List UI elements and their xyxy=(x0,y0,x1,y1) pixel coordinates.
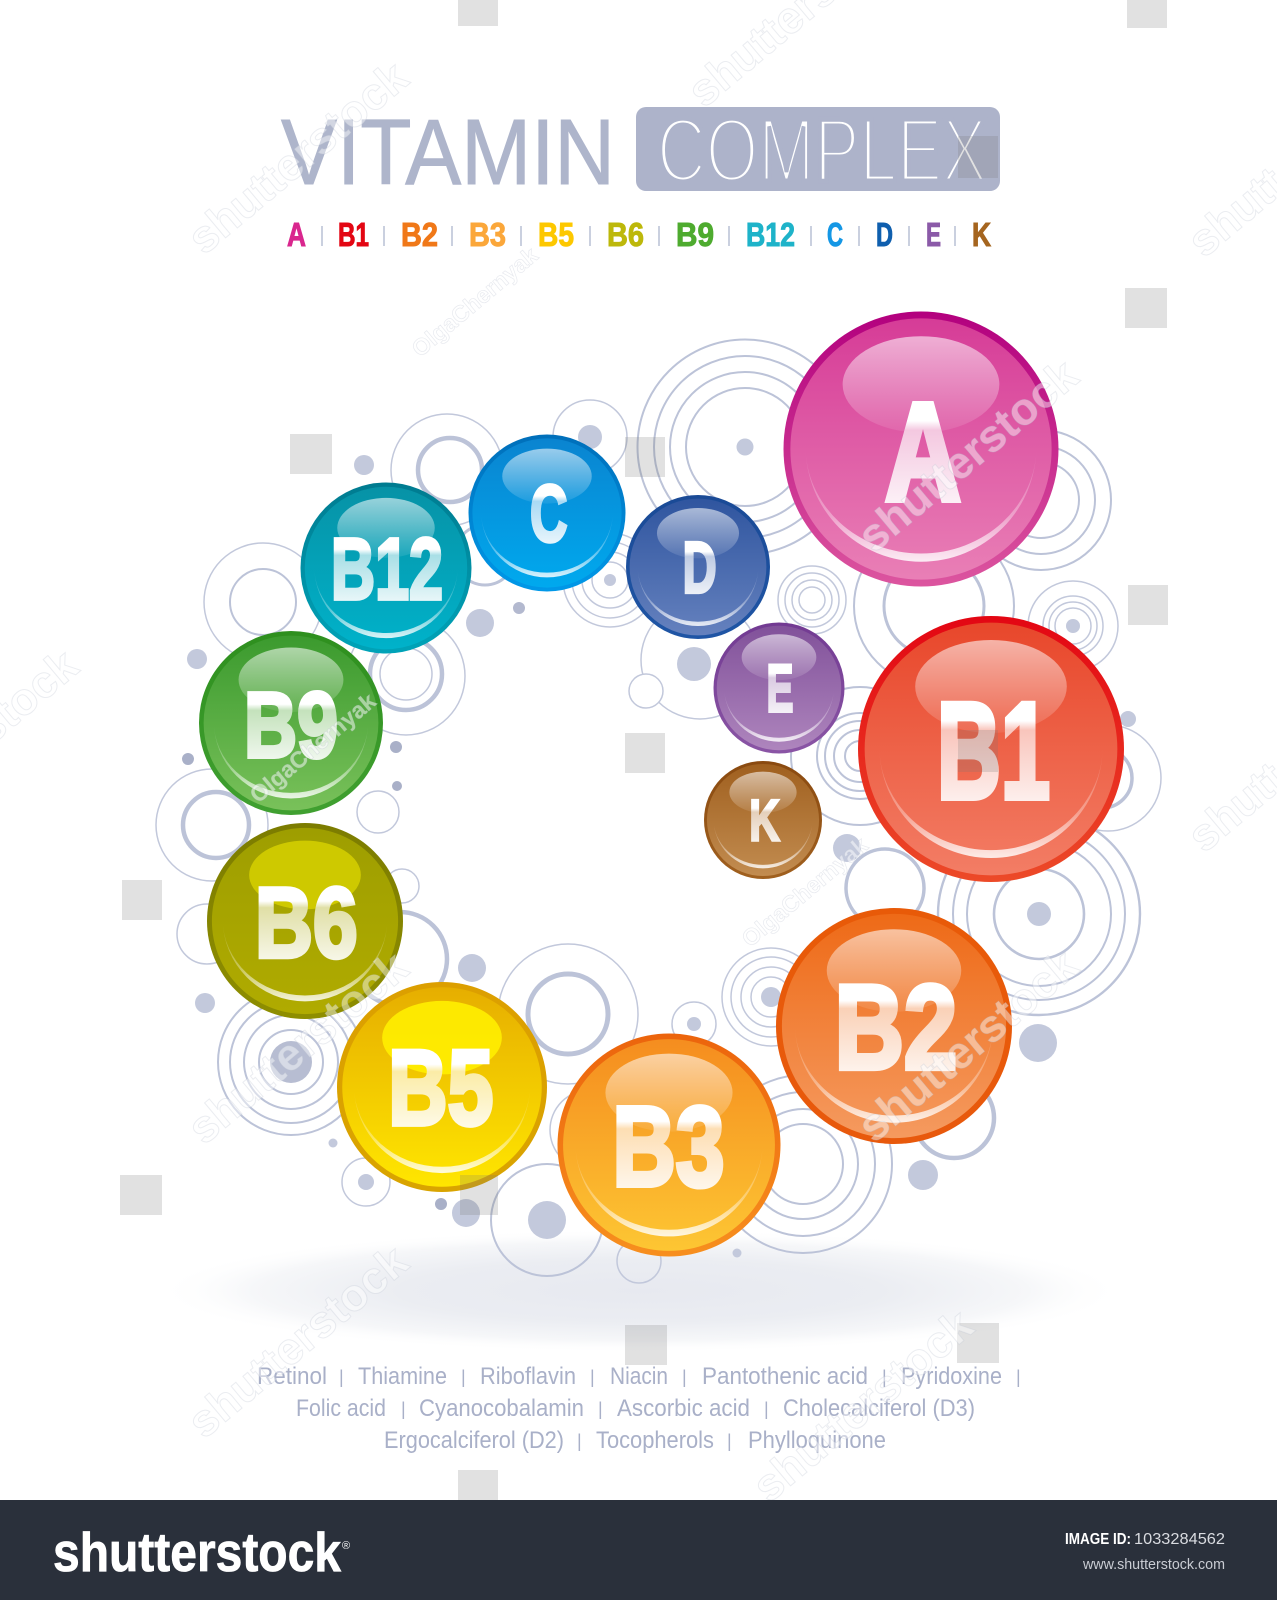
vitamin chemical names text block: | xyxy=(339,1367,344,1387)
vitamin chemical names text block: Riboflavin xyxy=(480,1363,576,1390)
bubble: vitamin B2: B2 xyxy=(835,960,957,1094)
bubble: vitamin A: A xyxy=(885,374,961,530)
vitamin letter legend row: B1 xyxy=(338,217,369,254)
vitamin letter legend row: B9 xyxy=(676,217,714,254)
stock watermarks: OlgaChernyak xyxy=(407,242,543,362)
bubble: vitamin B6 xyxy=(207,823,403,1019)
registered mark: ® xyxy=(342,1540,350,1552)
stock watermarks: OlgaChernyak xyxy=(737,832,873,952)
bubble: vitamin B3: B3 xyxy=(612,1084,724,1210)
stock watermarks: shutterstock xyxy=(178,940,418,1154)
vitamin letter legend row: A xyxy=(287,217,306,254)
vitamin chemical names text block: | xyxy=(590,1367,595,1387)
vitamin chemical names text block: Phylloquinone xyxy=(748,1427,886,1454)
vitamin letter legend row: B3 xyxy=(469,217,506,254)
vitamin letter legend row: E xyxy=(926,217,941,254)
vitamin chemical names text block: Pantothenic acid xyxy=(702,1363,868,1390)
vitamin chemical names text block: | xyxy=(727,1431,732,1451)
bubble: vitamin B1: B1 xyxy=(937,675,1050,828)
footer logo: shutterstock xyxy=(53,1521,341,1583)
vitamin chemical names text block xyxy=(257,1363,1021,1454)
vitamin chemical names text block: Ergocalciferol (D2) xyxy=(384,1427,564,1454)
bubble: vitamin B1 xyxy=(858,616,1124,882)
vitamin chemical names text block: Thiamine xyxy=(358,1363,447,1390)
vitamin chemical names text block: Retinol xyxy=(257,1363,327,1390)
bubble: vitamin B9: B9 xyxy=(244,673,338,777)
bubble: vitamin E: E xyxy=(766,650,794,726)
bubble: vitamin A xyxy=(784,312,1058,586)
vitamin letter legend row: D xyxy=(876,217,893,254)
vitamin chemical names text block: | xyxy=(461,1367,466,1387)
vitamin chemical names text block: | xyxy=(682,1367,687,1387)
vitamin chemical names text block: Folic acid xyxy=(296,1395,386,1422)
vitamin chemical names text block: | xyxy=(764,1399,769,1419)
vitamin chemical names text block: Tocopherols xyxy=(596,1427,714,1454)
vitamin letter legend row: K xyxy=(972,217,991,254)
bubble: vitamin K: K xyxy=(749,789,780,854)
vitamin chemical names text block: | xyxy=(1016,1367,1021,1387)
bubble: vitamin B5 xyxy=(337,982,547,1192)
vitamin letter legend row: B2 xyxy=(401,217,438,254)
vitamin letter legend row: B5 xyxy=(538,217,574,254)
bubble: vitamin B9 xyxy=(199,631,383,815)
image id label: IMAGE ID: xyxy=(1065,1531,1131,1548)
vitamin chemical names text block: Niacin xyxy=(610,1363,668,1390)
stock watermarks: shutterstock xyxy=(178,1234,418,1448)
vitamin chemical names text block: Pyridoxine xyxy=(901,1363,1002,1390)
vitamin letter legend row: B6 xyxy=(607,217,644,254)
bubble: vitamin B6: B6 xyxy=(255,868,358,979)
vitamin letter legend row xyxy=(287,217,991,254)
bubble: vitamin D xyxy=(626,495,770,639)
vitamin chemical names text block: | xyxy=(401,1399,406,1419)
bubble: vitamin C: C xyxy=(530,469,568,559)
decorative concentric circles behind the bubbles xyxy=(156,340,1161,1283)
stock watermarks: shutterstock xyxy=(848,938,1088,1152)
stock watermarks: OlgaChernyak xyxy=(245,688,381,808)
vitamin chemical names text block: Ascorbic acid xyxy=(617,1395,750,1422)
bubble: vitamin K xyxy=(704,761,822,879)
vitamin letter legend row: B12 xyxy=(746,217,795,254)
bubble: vitamin B5: B5 xyxy=(388,1029,493,1148)
stock watermarks: shutterstock xyxy=(178,50,418,264)
vitamin chemical names text block: | xyxy=(598,1399,603,1419)
vitamin chemical names text block: | xyxy=(577,1431,582,1451)
bubble: vitamin D: D xyxy=(683,527,717,608)
title: VITAMIN: VITAMIN xyxy=(281,100,615,204)
bubble: vitamin E xyxy=(714,622,844,754)
website: www.shutterstock.com xyxy=(1082,1556,1225,1573)
title badge: COMPLEX: COMPLEX xyxy=(657,101,987,201)
bubble: vitamin B2 xyxy=(776,908,1012,1144)
stock watermarks: shutterstock xyxy=(848,348,1088,562)
ground shadow under bubbles xyxy=(155,1229,1125,1353)
vitamin letter legend row: C xyxy=(827,217,843,254)
bubble: vitamin B12: B12 xyxy=(331,520,443,618)
stock watermarks: shutterstock xyxy=(743,1298,983,1512)
vitamin chemical names text block: Cyanocobalamin xyxy=(419,1395,584,1422)
vitamin chemical names text block: Cholecalciferol (D3) xyxy=(783,1395,975,1422)
bubble: vitamin B12 xyxy=(300,482,472,654)
footer bar xyxy=(0,1500,1277,1600)
bubble: vitamin B3 xyxy=(558,1034,780,1256)
image id number: 1033284562 xyxy=(1134,1531,1225,1548)
vitamin chemical names text block: | xyxy=(882,1367,887,1387)
bubble: vitamin C xyxy=(468,434,626,592)
